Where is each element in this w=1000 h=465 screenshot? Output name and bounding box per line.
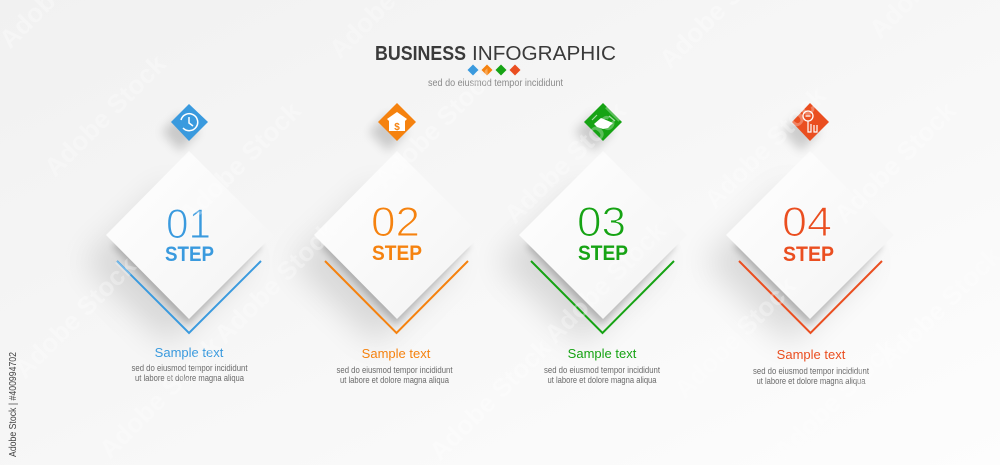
step 2 icon: house with dollar	[369, 103, 416, 151]
subtitle: sed do eiusmod tempor incididunt	[428, 78, 563, 89]
step 2 diamond	[314, 151, 481, 319]
step 2 description	[336, 365, 453, 385]
step 2 description: ut labore et dolore magna aliqua	[340, 375, 449, 385]
watermark: Adobe Stock	[698, 80, 832, 214]
watermark: Adobe Stock	[93, 330, 227, 464]
step 1 icon: clock	[162, 104, 208, 151]
step 4 heading: Sample text	[777, 347, 846, 362]
step 3	[498, 103, 687, 385]
step 3 number: 03	[577, 198, 626, 245]
step 4 chevron	[739, 261, 882, 333]
step 4 shadow	[705, 185, 883, 345]
step 3 shadow	[498, 185, 676, 345]
step 4 icon: idea bulb	[783, 103, 829, 151]
step 2 number: 02	[371, 198, 420, 245]
step 4 label: STEP	[783, 243, 834, 266]
step 2 shadow	[292, 185, 470, 345]
step 3 description: sed do eiusmod tempor incididunt	[544, 365, 660, 375]
watermark: Adobe Stock	[368, 60, 502, 194]
step 4 description	[753, 366, 869, 386]
step 4	[705, 103, 894, 386]
step 2 chevron	[325, 261, 468, 333]
step 3 diamond	[519, 151, 687, 319]
watermark: Adobe Stock	[538, 215, 672, 349]
step 3 description: ut labore et dolore magna aliqua	[548, 375, 656, 385]
step 2	[292, 103, 481, 385]
step 1 shadow	[84, 185, 262, 345]
step 4 number: 04	[782, 198, 832, 245]
step 1 description: ut labore et dolore magna aliqua	[135, 373, 244, 383]
step 1 description	[132, 363, 248, 383]
watermark: Adobe Stock	[423, 332, 557, 465]
step 4 diamond	[726, 151, 894, 319]
watermark: Adobe Stock	[768, 332, 902, 465]
step 2 description: sed do eiusmod tempor incididunt	[336, 365, 453, 375]
step 1 heading: Sample text	[155, 345, 224, 360]
watermark: Adobe Stock	[8, 250, 142, 384]
step 3 chevron	[531, 261, 674, 333]
watermark: Adobe Stock	[38, 48, 172, 182]
step 3 label: STEP	[578, 242, 628, 265]
step 1 label: STEP	[165, 243, 214, 266]
step 2 heading: Sample text	[362, 346, 431, 361]
step 1	[84, 104, 273, 383]
stock id side text: Adobe Stock | #400994702	[8, 352, 19, 457]
step 4 description: ut labore et dolore magna aliqua	[756, 376, 866, 386]
step 4 description: sed do eiusmod tempor incididunt	[753, 366, 869, 376]
watermark: Adobe Stock	[208, 215, 342, 349]
watermark: Adobe Stock	[173, 95, 307, 229]
step 1 description: sed do eiusmod tempor incididunt	[132, 363, 248, 373]
step 2 label: STEP	[372, 242, 422, 265]
step 3 description	[544, 365, 660, 385]
step 3 icon: handshake	[575, 103, 622, 151]
step 3 heading: Sample text	[568, 346, 637, 361]
step 2 icon: house with dollar: $	[394, 122, 400, 133]
step 1 number: 01	[166, 200, 211, 247]
title colour diamonds	[468, 64, 520, 76]
title: INFOGRAPHIC	[472, 43, 616, 65]
step 1 diamond	[106, 151, 273, 319]
watermark: Adobe Stock	[498, 95, 632, 229]
title	[375, 43, 616, 65]
title: BUSINESS	[375, 43, 466, 65]
watermark: Adobe Stock	[828, 95, 962, 229]
watermark: Adobe Stock	[668, 270, 802, 404]
step 1 chevron	[117, 261, 261, 333]
